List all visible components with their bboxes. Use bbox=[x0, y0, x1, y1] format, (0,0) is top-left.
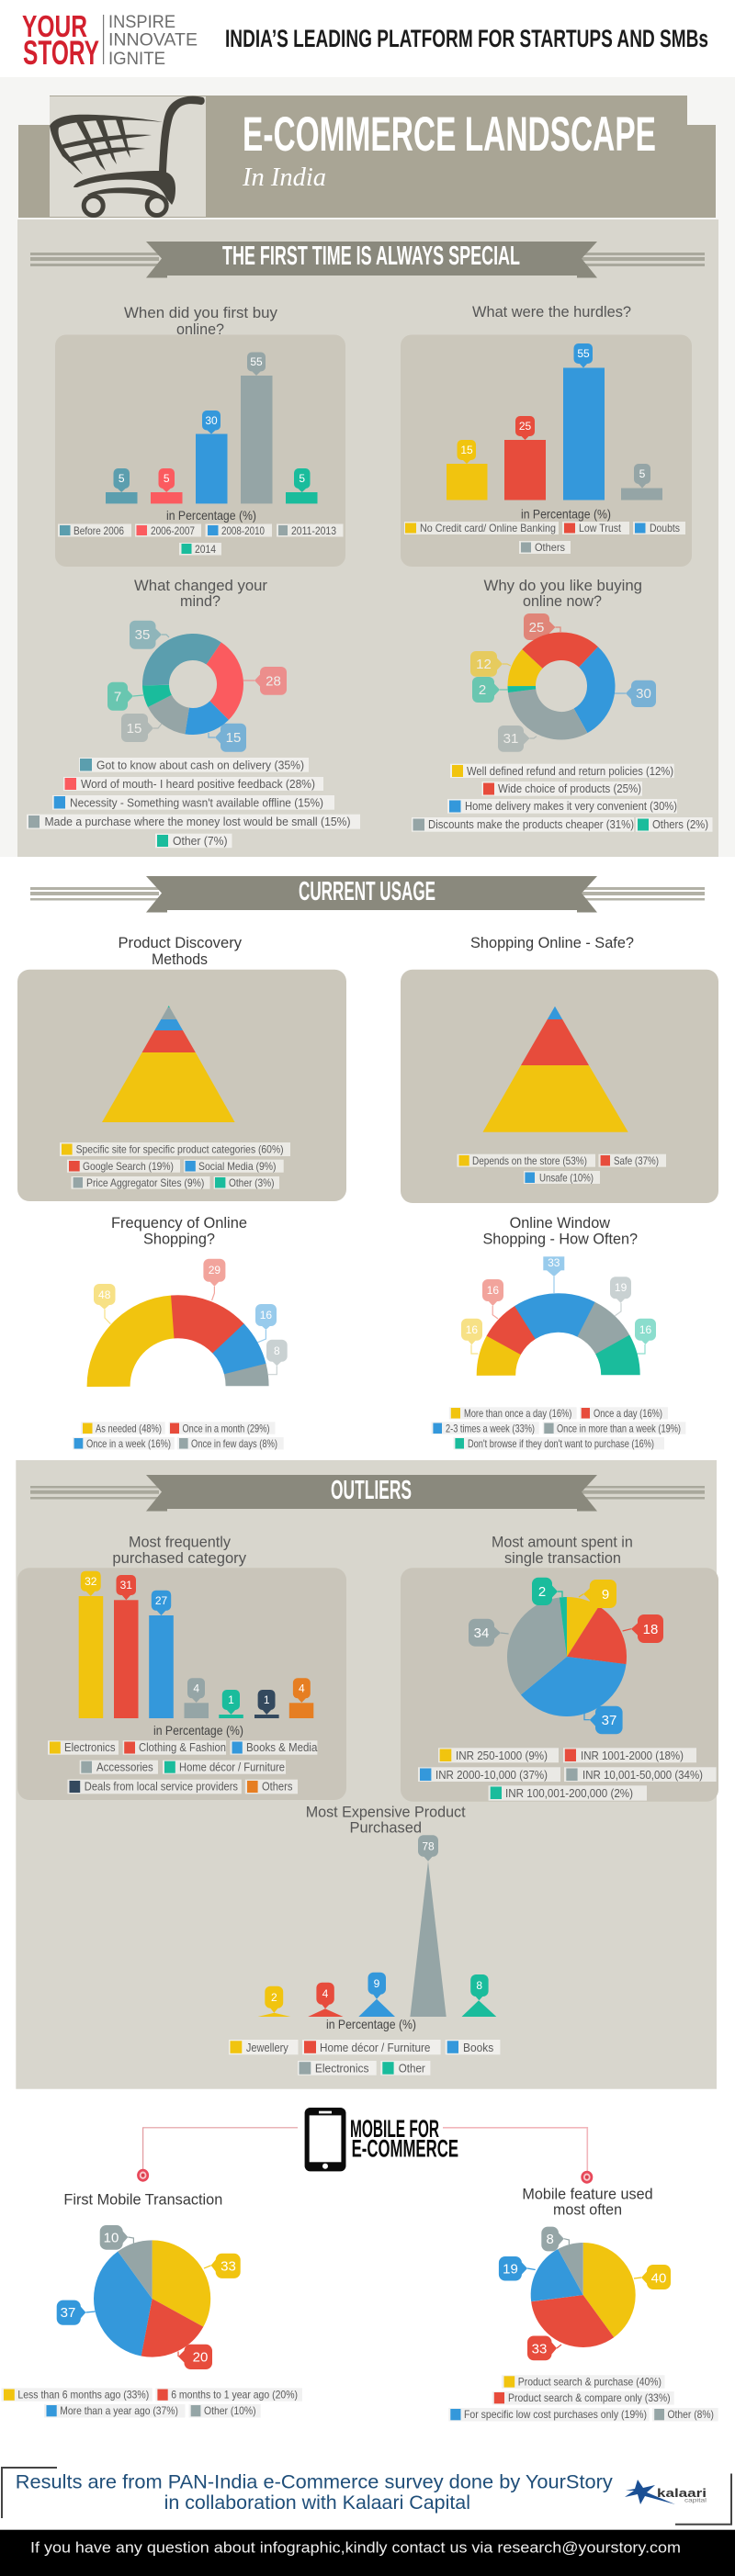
legend: 2006-2007 bbox=[151, 524, 195, 537]
chart heading: when did you first buy online: online? bbox=[176, 321, 224, 338]
legend: More than once a day (16%) bbox=[464, 1407, 571, 1420]
pie chart bbox=[111, 2258, 193, 2339]
legend: No Credit card/ Online Banking bbox=[420, 522, 556, 534]
bars bbox=[447, 367, 662, 500]
legend bbox=[60, 1142, 290, 1189]
legend: Necessity - Something wasn't available offline (15%) bbox=[70, 795, 323, 810]
chart heading: most frequently purchased category: Most frequently bbox=[129, 1534, 231, 1550]
legend: Other (3%) bbox=[229, 1176, 274, 1189]
legend bbox=[448, 2375, 718, 2421]
half donut bbox=[80, 1288, 276, 1484]
heading ribbon: outliers: OUTLIERS bbox=[331, 1476, 412, 1505]
callouts: 37 bbox=[61, 2305, 75, 2321]
footer contact bar bbox=[0, 2530, 735, 2576]
legend: INR 10,001-50,000 (34%) bbox=[582, 1768, 703, 1782]
bar value callouts: 5 bbox=[299, 472, 305, 485]
legend: Home décor / Furniture bbox=[179, 1761, 285, 1774]
pie chart bbox=[525, 1614, 609, 1699]
callouts: 16 bbox=[487, 1284, 499, 1297]
chart heading: shopping online safe: Shopping Online - Safe? bbox=[470, 934, 634, 951]
axis label: in Percentage (%) bbox=[166, 508, 256, 523]
legend: Once in a week (16%) bbox=[86, 1437, 171, 1450]
callouts bbox=[57, 2225, 241, 2369]
legend: Electronics bbox=[315, 2061, 369, 2075]
bar value callouts bbox=[81, 1571, 311, 1715]
legend: Product search & compare only (33%) bbox=[508, 2391, 671, 2404]
bar value callouts bbox=[114, 353, 311, 492]
callouts bbox=[461, 1256, 656, 1354]
section heading: E-COMMERCE bbox=[352, 2135, 458, 2163]
logo: YourStory: IGNITE bbox=[108, 49, 165, 69]
legend: Once in more than a week (19%) bbox=[557, 1422, 681, 1434]
callouts: 29 bbox=[209, 1264, 220, 1277]
heading: Most Expensive Product bbox=[306, 1804, 466, 1820]
callouts: 16 bbox=[466, 1323, 478, 1336]
legend bbox=[431, 1407, 685, 1450]
axis label: in Percentage (%) bbox=[521, 507, 611, 522]
bar value callouts: 4 bbox=[193, 1682, 199, 1695]
callouts: 40 bbox=[651, 2270, 666, 2287]
heading bbox=[483, 1214, 638, 1247]
callouts: 19 bbox=[503, 2261, 518, 2278]
bar value callouts: 15 bbox=[460, 444, 473, 456]
bar value callouts: 5 bbox=[164, 472, 170, 485]
legend: Accessories bbox=[96, 1761, 153, 1774]
heading bbox=[522, 2186, 653, 2219]
legend: Unsafe (10%) bbox=[539, 1172, 594, 1185]
credit box bbox=[2, 2468, 731, 2525]
section: mobile for e-commerce bbox=[2, 2108, 718, 2421]
bars bbox=[106, 376, 318, 503]
logo: YourStory: INSPIRE bbox=[108, 12, 175, 32]
legend: Doubts bbox=[650, 522, 680, 534]
bar value callouts: 1 bbox=[228, 1693, 234, 1706]
legend bbox=[229, 2040, 500, 2075]
legend: Word of mouth- I heard positive feedback (28%) bbox=[81, 777, 315, 791]
legend: Well defined refund and return policies (12%) bbox=[467, 765, 673, 778]
half donut bbox=[472, 1289, 644, 1461]
connector lines and targets bbox=[137, 2128, 593, 2184]
chart: first mobile transaction bbox=[2, 2191, 302, 2417]
logo: YourStory bbox=[22, 9, 198, 72]
callouts: 16 bbox=[639, 1323, 651, 1336]
legend: Don't browse if they don't want to purchase (16%) bbox=[468, 1437, 654, 1450]
chart heading: product discovery methods bbox=[118, 934, 242, 968]
legend: Product search & purchase (40%) bbox=[518, 2375, 662, 2388]
callouts: 30 bbox=[636, 686, 651, 702]
legend bbox=[48, 1740, 317, 1794]
chart heading: when did you first buy online bbox=[124, 304, 277, 338]
callouts: 19 bbox=[615, 1281, 628, 1294]
legend: INR 2000-10,000 (37%) bbox=[435, 1768, 548, 1782]
legend: Other (7%) bbox=[173, 834, 228, 848]
callouts bbox=[469, 1578, 663, 1734]
donut bbox=[141, 632, 245, 737]
chart heading: most frequently purchased category: purchased category bbox=[112, 1549, 246, 1567]
footer contact bar: If you have any question about infographic,kindly contact us via research@yourstory.com bbox=[30, 2538, 681, 2557]
legend bbox=[418, 1748, 717, 1801]
pyramid bbox=[102, 1006, 235, 1122]
legend: Safe (37%) bbox=[614, 1154, 659, 1167]
callouts: 31 bbox=[503, 731, 518, 747]
legend: Others bbox=[262, 1780, 292, 1793]
legend: Deals from local service providers bbox=[85, 1780, 238, 1793]
bar value callouts: 55 bbox=[250, 355, 263, 368]
callouts: 18 bbox=[643, 1622, 658, 1637]
heading: Purchased bbox=[349, 1818, 422, 1837]
chart heading: most amount spent: Most amount spent in bbox=[492, 1534, 633, 1550]
bar value callouts: 30 bbox=[205, 414, 218, 427]
logo: YourStory: YOUR bbox=[22, 9, 87, 43]
bar value callouts: 5 bbox=[119, 472, 125, 485]
legend: Wide choice of products (25%) bbox=[498, 782, 641, 795]
callouts: 2 bbox=[479, 682, 486, 698]
chart panel: when did you first buy online bbox=[55, 334, 345, 567]
legend: Other bbox=[399, 2061, 425, 2075]
value callouts bbox=[265, 1835, 489, 2013]
heading bbox=[111, 1214, 247, 1247]
callouts: 8 bbox=[547, 2232, 554, 2247]
legend: Price Aggregator Sites (9%) bbox=[86, 1176, 204, 1189]
callouts: 20 bbox=[193, 2349, 208, 2366]
section: current usage bbox=[17, 876, 718, 1484]
legend: Home delivery makes it very convenient (30%) bbox=[465, 800, 677, 813]
callouts: 28 bbox=[266, 674, 281, 689]
chart panel: shopping online safe bbox=[401, 970, 718, 1203]
heading ribbon: outliers bbox=[30, 1475, 705, 1512]
chart: most expensive product purchased bbox=[229, 1804, 500, 2075]
legend: Books bbox=[463, 2041, 494, 2054]
legend: Once a day (16%) bbox=[594, 1407, 662, 1420]
bar value callouts: 4 bbox=[299, 1682, 305, 1695]
chart: mobile feature used most often bbox=[448, 2186, 718, 2421]
title banner bbox=[18, 96, 716, 218]
legend bbox=[2, 2388, 302, 2417]
legend: Others bbox=[535, 541, 565, 554]
legend: Low Trust bbox=[579, 522, 622, 534]
legend bbox=[58, 523, 344, 556]
chart: why do you like buying online now bbox=[412, 577, 713, 832]
callouts: 16 bbox=[260, 1309, 272, 1322]
legend: INR 250-1000 (9%) bbox=[456, 1749, 548, 1762]
value callouts: 4 bbox=[322, 1987, 329, 2000]
chart: what changed your mind bbox=[27, 577, 360, 848]
callouts bbox=[499, 2227, 671, 2360]
section heading bbox=[350, 2115, 458, 2163]
chart: online window shopping bbox=[431, 1214, 685, 1461]
bar value callouts: 27 bbox=[155, 1594, 167, 1607]
heading ribbon: first time bbox=[30, 242, 705, 277]
chart heading: most frequently purchased category bbox=[112, 1534, 246, 1567]
heading: Why do you like buying bbox=[483, 577, 642, 594]
chart panel: what were the hurdles bbox=[401, 334, 692, 567]
legend: INR 100,001-200,000 (2%) bbox=[505, 1786, 633, 1800]
bar value callouts: 1 bbox=[264, 1693, 270, 1706]
callouts: 15 bbox=[127, 721, 141, 737]
chart panel: most frequently purchased category bbox=[17, 1568, 346, 1800]
bar value callouts: 25 bbox=[519, 420, 531, 433]
heading bbox=[134, 577, 267, 610]
credit text: in collaboration with Kalaari Capital bbox=[164, 2492, 470, 2514]
credit text bbox=[16, 2470, 613, 2514]
pyramid bbox=[483, 1007, 628, 1132]
legend: More than a year ago (37%) bbox=[60, 2404, 178, 2417]
pie chart bbox=[547, 2258, 620, 2332]
callouts: 15 bbox=[226, 730, 241, 746]
legend: For specific low cost purchases only (19%) bbox=[464, 2408, 647, 2421]
bar value callouts: 55 bbox=[577, 347, 590, 360]
bars bbox=[79, 1596, 313, 1718]
value callouts: 2 bbox=[271, 1991, 277, 2004]
logo: YourStory: STORY bbox=[23, 34, 99, 72]
legend bbox=[73, 1422, 284, 1450]
value callouts: 9 bbox=[374, 1977, 380, 1990]
legend: Specific site for specific product categories (60%) bbox=[76, 1142, 284, 1155]
logo: YourStory: INNOVATE bbox=[108, 29, 198, 50]
heading: Shopping - How Often? bbox=[483, 1231, 638, 1247]
heading: What changed your bbox=[134, 577, 267, 594]
callouts bbox=[470, 613, 656, 752]
legend bbox=[27, 758, 360, 848]
legend: Got to know about cash on delivery (35%) bbox=[96, 759, 304, 771]
chart heading: when did you first buy online: When did you first buy bbox=[124, 304, 277, 321]
heading bbox=[306, 1804, 466, 1837]
heading: Shopping? bbox=[143, 1231, 215, 1247]
bar value callouts: 5 bbox=[639, 467, 646, 480]
logo: Kalaari Capital bbox=[625, 2480, 707, 2504]
legend: Made a purchase where the money lost would be small (15%) bbox=[44, 815, 351, 828]
legend: 2-3 times a week (33%) bbox=[446, 1422, 535, 1434]
legend bbox=[412, 764, 713, 832]
legend: Others (2%) bbox=[652, 818, 708, 831]
callouts: 37 bbox=[602, 1713, 616, 1728]
icon: smartphone bbox=[305, 2108, 345, 2171]
heading: Mobile feature used bbox=[522, 2186, 653, 2202]
heading: Online Window bbox=[510, 1214, 611, 1232]
legend: Before 2006 bbox=[74, 524, 124, 537]
panel: outliers bbox=[16, 1460, 718, 2089]
bar value callouts: 31 bbox=[120, 1579, 132, 1592]
legend: Jewellery bbox=[246, 2041, 288, 2054]
callouts: 25 bbox=[529, 620, 544, 636]
legend: Social Media (9%) bbox=[198, 1160, 276, 1173]
bar value callouts: 32 bbox=[85, 1575, 97, 1588]
callouts: 9 bbox=[602, 1587, 609, 1603]
legend: Home décor / Furniture bbox=[320, 2041, 430, 2054]
callouts: 35 bbox=[135, 627, 150, 643]
callouts bbox=[107, 621, 287, 752]
heading: First Mobile Transaction bbox=[63, 2191, 222, 2208]
callouts: 33 bbox=[548, 1256, 560, 1269]
legend: 6 months to 1 year ago (20%) bbox=[171, 2388, 298, 2401]
chart heading: product discovery methods: Methods bbox=[152, 951, 208, 968]
chart heading: hurdles: What were the hurdles? bbox=[472, 303, 631, 321]
header: YourStory logo and tagline bbox=[22, 9, 708, 72]
donut bbox=[505, 630, 617, 742]
value callouts: 78 bbox=[422, 1840, 435, 1853]
legend: 2011-2013 bbox=[291, 524, 336, 537]
heading: Frequency of Online bbox=[111, 1214, 247, 1232]
axis label: in Percentage (%) bbox=[326, 2017, 416, 2031]
logo: Kalaari Capital: capital bbox=[684, 2498, 707, 2503]
axis label: in Percentage (%) bbox=[153, 1723, 243, 1738]
legend: 2008-2010 bbox=[221, 524, 265, 537]
callouts: 33 bbox=[220, 2259, 236, 2274]
heading: most often bbox=[553, 2200, 622, 2219]
heading ribbon: first time: THE FIRST TIME IS ALWAYS SPECIAL bbox=[222, 242, 520, 271]
legend bbox=[404, 522, 685, 554]
callouts bbox=[94, 1259, 288, 1375]
credit text: Results are from PAN-India e-Commerce survey done by YourStory bbox=[16, 2470, 613, 2492]
section heading: MOBILE FOR bbox=[350, 2115, 439, 2143]
callouts: 2 bbox=[538, 1584, 546, 1600]
triangle bars bbox=[258, 1862, 496, 2017]
chart panel: product discovery methods bbox=[17, 970, 346, 1201]
legend: Once in few days (8%) bbox=[191, 1437, 277, 1450]
icon: shopping cart bbox=[50, 96, 205, 215]
chart: frequency of online shopping bbox=[73, 1214, 288, 1484]
heading ribbon: current usage bbox=[30, 876, 705, 913]
value callouts: 8 bbox=[476, 1979, 482, 1992]
legend: Google Search (19%) bbox=[83, 1160, 174, 1173]
legend: INR 1001-2000 (18%) bbox=[581, 1749, 684, 1762]
legend: Books & Media bbox=[246, 1741, 317, 1754]
heading ribbon: current usage: CURRENT USAGE bbox=[299, 877, 435, 906]
legend: Clothing & Fashion bbox=[139, 1741, 226, 1754]
callouts: 10 bbox=[104, 2230, 119, 2246]
legend: Less than 6 months ago (33%) bbox=[17, 2388, 149, 2401]
callouts: 8 bbox=[274, 1344, 280, 1357]
panel: the first time is always special bbox=[17, 219, 718, 857]
legend: Depends on the store (53%) bbox=[472, 1154, 587, 1167]
legend: Electronics bbox=[64, 1741, 116, 1754]
chart heading: most amount spent: single transaction bbox=[504, 1549, 621, 1567]
legend bbox=[458, 1154, 666, 1185]
legend: As needed (48%) bbox=[96, 1422, 162, 1434]
legend: Other (10%) bbox=[204, 2404, 256, 2417]
logo: Kalaari Capital: kalaari bbox=[657, 2486, 707, 2500]
legend: 2014 bbox=[195, 543, 216, 556]
bar value callouts bbox=[458, 343, 650, 489]
callouts: 12 bbox=[476, 657, 492, 672]
chart heading: product discovery methods: Product Discovery bbox=[118, 934, 242, 951]
legend: Discounts make the products cheaper (31%) bbox=[428, 818, 634, 831]
heading bbox=[483, 577, 642, 610]
legend: Other (8%) bbox=[667, 2408, 714, 2421]
heading: online now? bbox=[523, 592, 602, 610]
callouts: 33 bbox=[532, 2342, 547, 2357]
callouts: 34 bbox=[474, 1625, 489, 1641]
callouts: 48 bbox=[98, 1288, 111, 1301]
subtitle: In India bbox=[242, 163, 326, 192]
heading: mind? bbox=[180, 592, 220, 610]
chart heading: most amount spent bbox=[492, 1534, 633, 1567]
chart panel: most amount spent in single transaction bbox=[401, 1568, 718, 1802]
callouts: 7 bbox=[114, 689, 121, 705]
legend: Once in a month (29%) bbox=[182, 1422, 270, 1434]
